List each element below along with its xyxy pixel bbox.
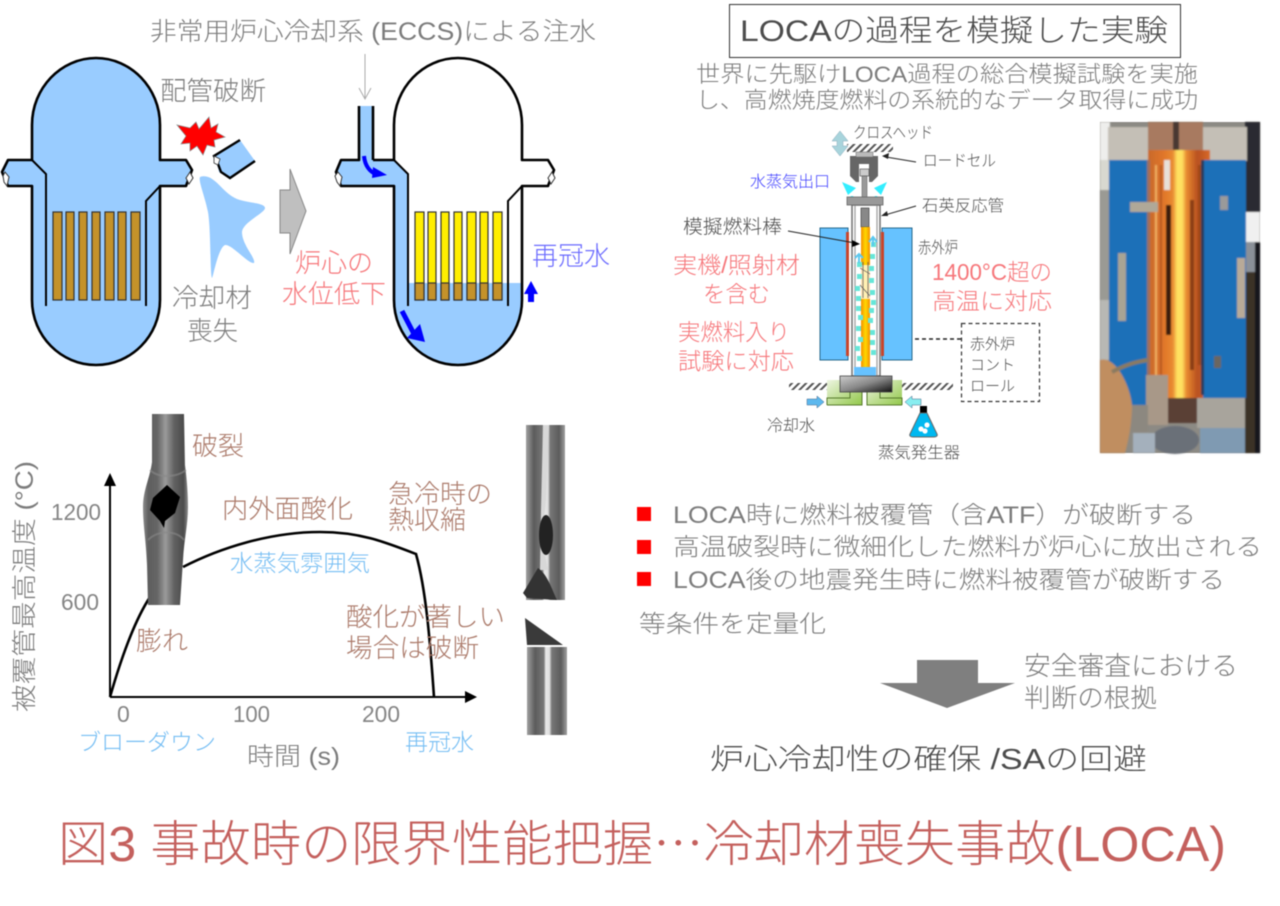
arrow: transition between states — [280, 169, 306, 254]
y ticks: 600 — [61, 589, 99, 615]
apparatus labels: 水蒸気出口 — [750, 173, 830, 191]
arrow: water flow to lower plenum — [402, 311, 425, 342]
label: coolant loss: 喪失 — [187, 316, 238, 346]
intro text: し、高燃焼度燃料の系統的なデータ取得に成功 — [696, 88, 1198, 113]
load cell — [850, 156, 878, 182]
callout: irradiated material: 実機/照射材 — [673, 252, 800, 278]
callout: high temperature: 高温に対応 — [932, 288, 1052, 314]
arrow: ECCS injection — [359, 54, 371, 99]
callout: high temperature — [932, 259, 1052, 314]
label: basis for safety review: 安全審査における — [1024, 651, 1238, 681]
infrared furnace — [820, 228, 848, 360]
fuel fragments — [855, 242, 876, 361]
axes — [110, 480, 468, 697]
green coolant connectors — [827, 380, 862, 405]
apparatus labels: 冷却水 — [767, 417, 815, 435]
y ticks — [51, 499, 101, 615]
apparatus labels: クロスヘッド — [853, 124, 933, 142]
x axis title: 時間 (s) — [247, 743, 340, 771]
bullet 1: LOCA時に燃料被覆管（含ATF）が破断する — [673, 502, 1196, 529]
callout: real fuel tests — [678, 319, 794, 374]
label: ECCS injection: 非常用炉心冷却系 (ECCS)による注水 — [150, 18, 596, 46]
photo: ruptured cladding tube — [143, 414, 188, 605]
label: fracture when oxidized — [346, 602, 505, 663]
leader: load cell — [886, 157, 916, 162]
cooling water arrow — [807, 396, 824, 408]
steam inlet arrow — [905, 396, 921, 408]
crosshead hatch — [847, 144, 893, 152]
x ticks: 100 — [233, 701, 270, 727]
label: swelling: 膨れ — [136, 626, 188, 656]
control connection — [915, 338, 961, 340]
icon: crosshead motion arrow — [832, 131, 848, 156]
heading: LOCA simulation experiment: LOCAの過程を模擬した実験 — [740, 15, 1168, 48]
heading: LOCA simulation experiment — [730, 4, 1180, 58]
submerged part of rods — [415, 283, 502, 300]
label: fracture when oxidized: 場合は破断 — [346, 633, 479, 663]
bullet 2: 高温破裂時に微細化した燃料が炉心に放出される — [673, 534, 1262, 561]
apparatus labels: 石英反応管 — [922, 197, 1004, 215]
heated fuel rods — [415, 212, 502, 300]
label: basis for safety review — [1024, 651, 1238, 713]
vessel with coolant — [2, 58, 192, 365]
arrow: injected water flow — [364, 156, 387, 178]
lost coolant spray — [200, 176, 265, 278]
panel: reactor vessel during pipe break — [2, 58, 193, 365]
intro text — [696, 62, 1198, 113]
fuel rods — [53, 212, 140, 300]
leader: simulated fuel rod — [788, 231, 855, 243]
panel: test apparatus diagram — [673, 124, 1052, 462]
infrared furnace control box: 赤外炉 — [970, 336, 1015, 353]
label: pipe break: 配管破断 — [160, 76, 266, 106]
panel: temperature chart — [11, 431, 505, 771]
leader: quartz tube — [885, 206, 916, 215]
floor hatches — [789, 383, 827, 390]
apparatus labels: 模擬燃料棒 — [683, 216, 782, 238]
photo: fractured cladding tube — [523, 425, 567, 735]
callout: real fuel tests: 試験に対応 — [678, 348, 794, 374]
vessel outline — [336, 58, 554, 365]
steam outlet arrows — [842, 182, 887, 206]
conclusion text: 炉心冷却性の確保 /SAの回避 — [710, 743, 1147, 776]
label: steam atmosphere: 水蒸気雰囲気 — [230, 550, 370, 576]
x ticks — [117, 701, 400, 727]
label: rupture: 破裂 — [192, 431, 244, 461]
axis arrowheads — [104, 473, 477, 703]
core barrel — [32, 160, 160, 306]
callout: irradiated material: を含む — [703, 281, 770, 307]
callout: real fuel tests: 実燃料入り — [678, 319, 790, 345]
infrared furnace control box: ロール — [970, 378, 1015, 395]
label: reflood: 再冠水 — [532, 241, 610, 271]
leader arrowhead: quartz tube — [881, 211, 888, 216]
core barrel — [394, 160, 522, 306]
broken pipe piece — [214, 140, 255, 178]
label: core water level drop: 炉心の — [295, 248, 373, 278]
icon: steam generator flask — [910, 406, 937, 437]
leader arrowhead: load cell — [882, 153, 889, 159]
apparatus labels: 蒸気発生器 — [878, 444, 960, 462]
temperature curve — [110, 532, 434, 697]
panel: findings list — [637, 502, 1262, 638]
label: coolant loss: 冷却材 — [172, 283, 252, 313]
icon: pipe rupture burst — [177, 117, 225, 155]
leader arrowhead: fuel rod — [852, 240, 860, 247]
x ticks: 200 — [362, 701, 400, 727]
y axis title: 被覆管最高温度 (°C) — [11, 461, 39, 712]
label: core water level drop: 水位低下 — [282, 279, 386, 309]
apparatus labels: ロードセル — [923, 153, 996, 170]
label: coolant loss — [172, 283, 252, 346]
intro text: 世界に先駆けLOCA過程の総合模擬試験を実施 — [696, 62, 1198, 87]
label: thermal shrinkage — [388, 479, 492, 535]
water in lower plenum, downcomer and pipes — [394, 283, 522, 365]
bullet 3: LOCA後の地震発生時に燃料被覆管が破断する — [673, 567, 1225, 594]
label: thermal shrinkage: 熱収縮 — [388, 505, 466, 535]
base block — [840, 376, 892, 392]
callout: irradiated material — [673, 252, 800, 307]
closing line: 等条件を定量化 — [639, 611, 826, 638]
water at tube bottom — [854, 367, 876, 376]
label: core water level drop — [282, 248, 386, 309]
label: oxidation: 内外面酸化 — [222, 494, 353, 524]
label: fracture when oxidized: 酸化が著しい — [346, 602, 505, 632]
figure title: 図3 事故時の限界性能把握 …冷却材喪失事故(LOCA) — [58, 805, 1226, 876]
infrared furnace control box — [962, 324, 1040, 402]
arrow: conclusion — [880, 660, 1015, 708]
panel: reactor vessel during reflood — [335, 58, 555, 365]
x ticks: 0 — [117, 701, 130, 727]
callout: high temperature: 1400°C超の — [932, 259, 1052, 285]
y ticks: 1200 — [51, 499, 101, 525]
arrow: reflood rising — [524, 281, 538, 302]
label: basis for safety review: 判断の根拠 — [1024, 683, 1157, 713]
label: blowdown: ブローダウン — [78, 729, 216, 755]
infrared furnace control box: コント — [970, 357, 1015, 374]
label: reflood phase: 再冠水 — [405, 729, 474, 755]
photo: infrared furnace in operation — [1100, 122, 1260, 454]
label: thermal shrinkage: 急冷時の — [388, 479, 492, 509]
quartz reaction tube — [852, 205, 880, 376]
simulated fuel rod — [861, 208, 869, 227]
apparatus labels: 赤外炉 — [918, 239, 958, 257]
apparatus labels — [683, 124, 1004, 462]
